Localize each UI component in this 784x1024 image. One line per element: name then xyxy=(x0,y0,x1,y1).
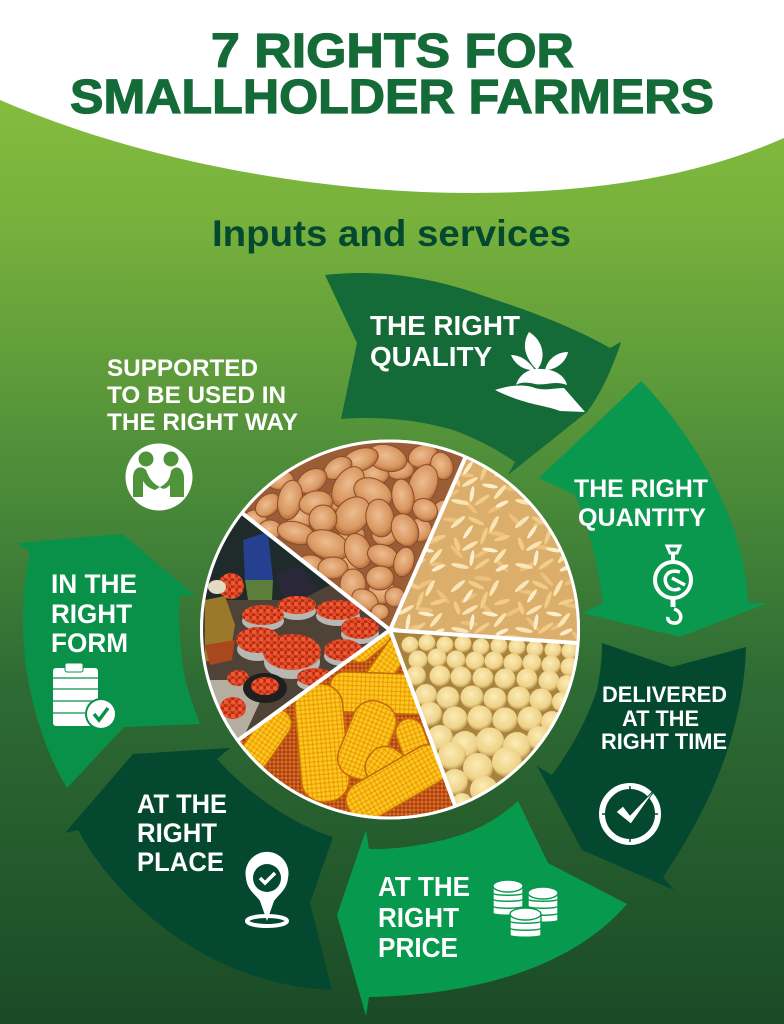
subtitle: Inputs and services xyxy=(212,213,571,254)
label: delivered at the right time: RIGHT TIME xyxy=(601,729,727,754)
arrow: at the right place xyxy=(65,748,333,990)
label: at the right price: PRICE xyxy=(378,932,458,963)
label: in the right form: IN THE xyxy=(51,569,137,599)
label: the right quantity xyxy=(574,475,708,532)
label: in the right form xyxy=(51,569,137,658)
icon: hand holding plant xyxy=(495,332,585,412)
photo: peanuts xyxy=(244,442,464,627)
label: the right quality: QUALITY xyxy=(370,341,492,372)
label: delivered at the right time xyxy=(601,682,727,754)
label: at the right price xyxy=(378,871,470,963)
photo: tomato market xyxy=(203,516,387,738)
label: in the right form: FORM xyxy=(51,628,128,658)
icon: hanging scale xyxy=(655,546,691,623)
label: supported to be used in the right way: TO BE USED IN xyxy=(107,382,286,409)
pie of crop photos xyxy=(200,435,585,828)
title: 7 RIGHTS FOR xyxy=(211,25,574,78)
label: the right quantity: QUANTITY xyxy=(578,504,706,532)
arrow: delivered at the right time xyxy=(537,643,746,890)
white wedge dividers xyxy=(237,457,578,808)
arrow: in the right form xyxy=(17,534,200,788)
label: delivered at the right time: AT THE xyxy=(622,706,699,731)
white header curve xyxy=(0,0,784,193)
arrow: the right quality xyxy=(325,273,621,475)
support block xyxy=(107,355,298,510)
label: at the right place xyxy=(137,789,227,877)
arrow: the right quantity xyxy=(539,381,768,637)
label: supported to be used in the right way: SUPPORTED xyxy=(107,355,258,382)
label: at the right price: AT THE xyxy=(378,871,470,902)
icon: coin stacks xyxy=(493,880,558,937)
label: at the right place: PLACE xyxy=(137,847,224,877)
icon: clipboard with check xyxy=(53,663,117,730)
label: supported to be used in the right way: THE RIGHT WAY xyxy=(107,409,298,436)
label: at the right price: RIGHT xyxy=(378,902,459,933)
title xyxy=(70,25,714,124)
label: in the right form: RIGHT xyxy=(51,599,132,629)
photo: corn cobs xyxy=(240,633,456,820)
label: the right quantity: THE RIGHT xyxy=(574,475,708,503)
label: the right quality: THE RIGHT xyxy=(370,310,520,341)
label: at the right place: AT THE xyxy=(137,789,227,819)
label: delivered at the right time: DELIVERED xyxy=(602,682,727,707)
photo: rice grains xyxy=(393,459,577,641)
icon: location pin xyxy=(246,852,289,926)
arrow: at the right price xyxy=(337,801,627,1016)
photo: soybeans xyxy=(393,632,576,807)
label: supported to be used in the right way xyxy=(107,355,298,436)
icon: handshake xyxy=(126,444,192,510)
title: SMALLHOLDER FARMERS xyxy=(70,71,714,124)
label: at the right place: RIGHT xyxy=(137,818,217,848)
label: the right quality xyxy=(370,310,520,372)
icon: clock with check xyxy=(602,786,658,842)
